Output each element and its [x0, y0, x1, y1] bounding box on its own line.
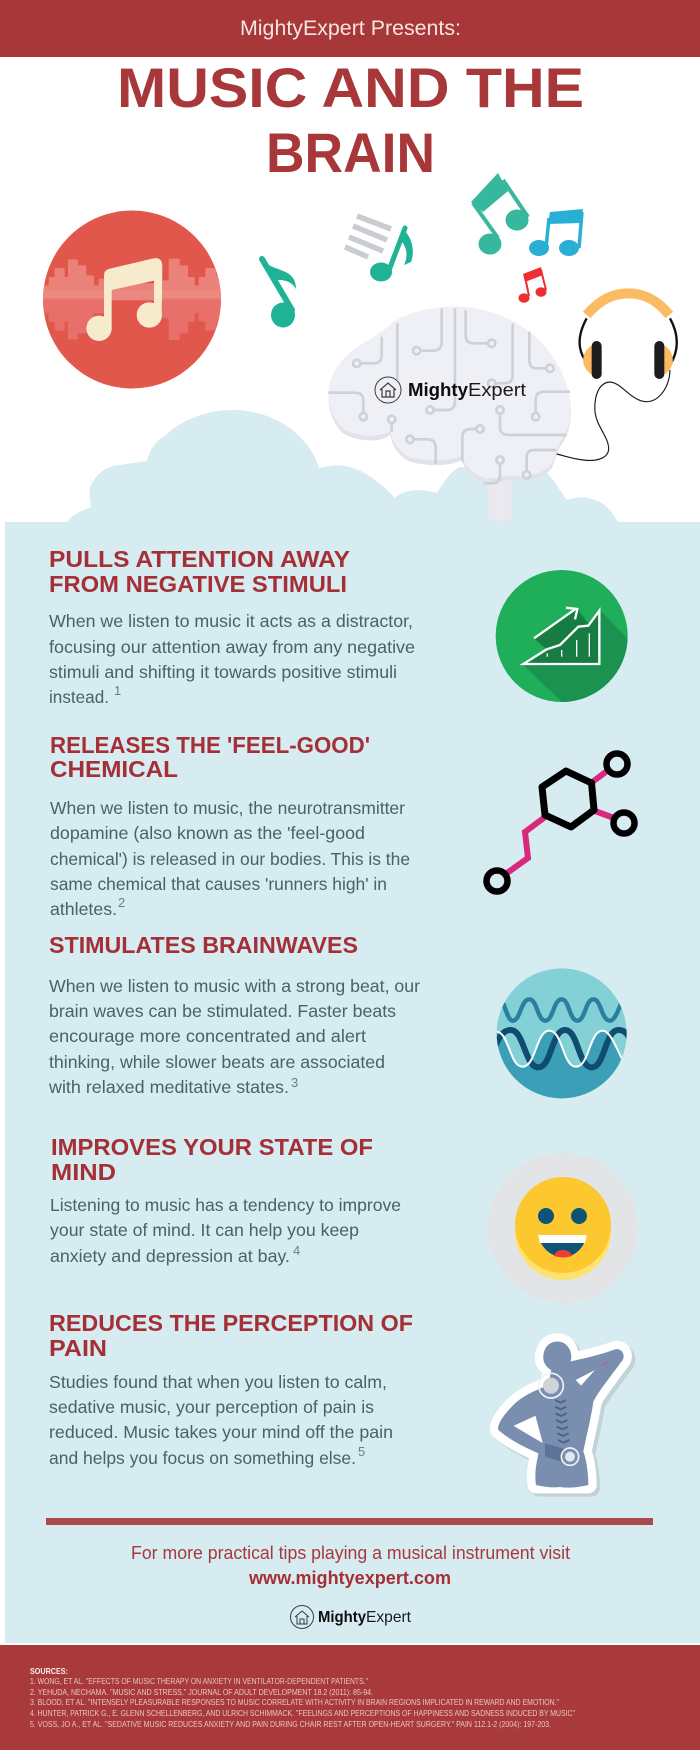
heading 5: REDUCES THE PERCEPTION OF: [49, 1310, 413, 1336]
heading 3: STIMULATES BRAINWAVES: [49, 932, 358, 958]
body text 3: brain waves can be stimulated. Faster beats: [49, 1001, 396, 1021]
footer logo: [290, 1606, 412, 1628]
section 1: attention: [49, 546, 643, 707]
body text 3: When we listen to music with a strong beat, our: [49, 976, 420, 996]
brain logo: Mighty: [408, 380, 468, 400]
body text 2: same chemical that causes 'runners high' in: [50, 874, 387, 894]
heading 2: RELEASES THE 'FEEL-GOOD': [50, 732, 370, 758]
body text 2: [50, 798, 410, 919]
section 2: chemical: [50, 732, 634, 919]
icon: sheet lines: [345, 216, 391, 257]
body text 3: encourage more concentrated and alert: [49, 1026, 366, 1046]
body text 4: Listening to music has a tendency to improve: [50, 1195, 401, 1215]
body text 2: When we listen to music, the neurotransmitter: [50, 798, 405, 818]
brain logo: [375, 377, 526, 403]
headphone cable: [557, 370, 670, 460]
heading 2: CHEMICAL: [50, 756, 178, 782]
section 5: pain: [49, 1310, 627, 1488]
header banner: [0, 0, 700, 57]
title: [117, 56, 584, 184]
body text 5: sedative music, your perception of pain is: [49, 1397, 374, 1417]
heading 4: MIND: [51, 1159, 116, 1185]
icon: blue double note: [529, 209, 583, 256]
footer logo: Expert: [366, 1609, 412, 1626]
website url: www.mightyexpert.com: [248, 1568, 451, 1588]
body text 5: Studies found that when you listen to calm,: [49, 1372, 387, 1392]
body text 1: focusing our attention away from any negative: [49, 637, 415, 657]
body text 3: with relaxed meditative states.: [48, 1077, 289, 1097]
body text 3: 3: [291, 1075, 298, 1090]
heading 4: IMPROVES YOUR STATE OF: [51, 1134, 373, 1160]
header text: MightyExpert Presents:: [240, 17, 461, 40]
sources heading: SOURCES:: [30, 1666, 68, 1676]
sources list: 1. WONG, ET AL. "EFFECTS OF MUSIC THERAPY ON ANXIETY IN VENTILATOR-DEPENDENT PATIENTS.": [30, 1677, 368, 1686]
body text 4: your state of mind. It can help you keep: [50, 1220, 359, 1240]
icon: red double note: [518, 267, 546, 303]
footer logo: Mighty: [318, 1609, 366, 1626]
icon: music circle: [40, 210, 227, 388]
section 4: state of mind: [50, 1134, 638, 1303]
section 3: brainwaves: [48, 932, 630, 1103]
title: BRAIN: [266, 121, 435, 184]
body text 5: [49, 1372, 393, 1468]
sources list: 2. YEHUDA, NECHAMA. "MUSIC AND STRESS." JOURNAL OF ADULT DEVELOPMENT 18.2 (2011): 85-94.: [30, 1688, 373, 1697]
title: MUSIC AND THE: [117, 56, 584, 119]
circuit traces: [328, 308, 570, 483]
icon: green note left: [262, 259, 296, 328]
icon: waves circle: [493, 967, 630, 1103]
call to action: For more practical tips playing a musical instrument visit: [131, 1543, 570, 1563]
heading 1: PULLS ATTENTION AWAY: [49, 546, 350, 572]
icon: headphones: [557, 293, 677, 460]
sources list: 4. HUNTER, PATRICK G., E. GLENN SCHELLENBERG, AND ULRICH SCHIMMACK. "FEELINGS AND PERCEPTIONS OF HAPPINESS AND SADNESS INDUCED BY MUSIC": [30, 1709, 575, 1718]
heading 5: PAIN: [49, 1335, 107, 1361]
body text 4: 4: [293, 1243, 300, 1258]
body text 1: [49, 611, 415, 707]
icon: brain with circuits: [320, 300, 580, 521]
sources list: 3. BLOOD, ET AL. "INTENSELY PLEASURABLE RESPONSES TO MUSIC CORRELATE WITH ACTIVITY IN BRAIN REGIONS IMPLICATED IN REWARD AND EMOTION.": [30, 1698, 559, 1707]
cloud background panel: [5, 410, 700, 1643]
body text 2: dopamine (also known as the 'feel-good: [50, 823, 365, 843]
heading 2: [50, 732, 370, 782]
note glyph: [86, 258, 162, 341]
body text 1: 1: [114, 683, 121, 698]
sources list: 5. VOSS, JO A., ET AL. "SEDATIVE MUSIC REDUCES ANXIETY AND PAIN DURING CHAIR REST AFTER OPEN-HEART SURGERY." PAIN 112.1-2 (2004): 197-203.: [30, 1720, 551, 1729]
body text 5: reduced. Music takes your mind off the pain: [49, 1422, 393, 1442]
body text 1: When we listen to music it acts as a distractor,: [49, 611, 413, 631]
call to action: [131, 1543, 570, 1588]
body text 2: athletes.: [50, 899, 117, 919]
body text 5: and helps you focus on something else.: [49, 1448, 356, 1468]
icon: green chart circle: [496, 570, 628, 702]
heading 1: [49, 546, 350, 597]
footer panel: sources: [0, 1645, 700, 1750]
icon: teal double note: [471, 173, 528, 254]
icon: back pain figure: [498, 1342, 627, 1488]
body text 4: anxiety and depression at bay.: [50, 1246, 290, 1266]
icon: smiley: [488, 1153, 638, 1303]
icon: molecule: [486, 754, 634, 892]
heading 4: [51, 1134, 373, 1185]
body text 1: instead.: [49, 687, 109, 707]
body text 2: 2: [118, 895, 125, 910]
body text 1: stimuli and shifting it towards positive stimuli: [49, 662, 397, 682]
brain logo: Expert: [468, 380, 526, 400]
body text 3: thinking, while slower beats are associated: [49, 1052, 385, 1072]
body text 2: chemical') is released in our bodies. This is the: [50, 849, 410, 869]
heading 5: [49, 1310, 413, 1361]
body text 4: [50, 1195, 401, 1266]
icon: green note centre: [370, 228, 413, 282]
body text 3: [48, 976, 420, 1097]
sources list: [30, 1677, 575, 1729]
divider bar: [46, 1518, 653, 1525]
body text 5: 5: [358, 1444, 365, 1459]
heading 1: FROM NEGATIVE STIMULI: [49, 571, 347, 597]
